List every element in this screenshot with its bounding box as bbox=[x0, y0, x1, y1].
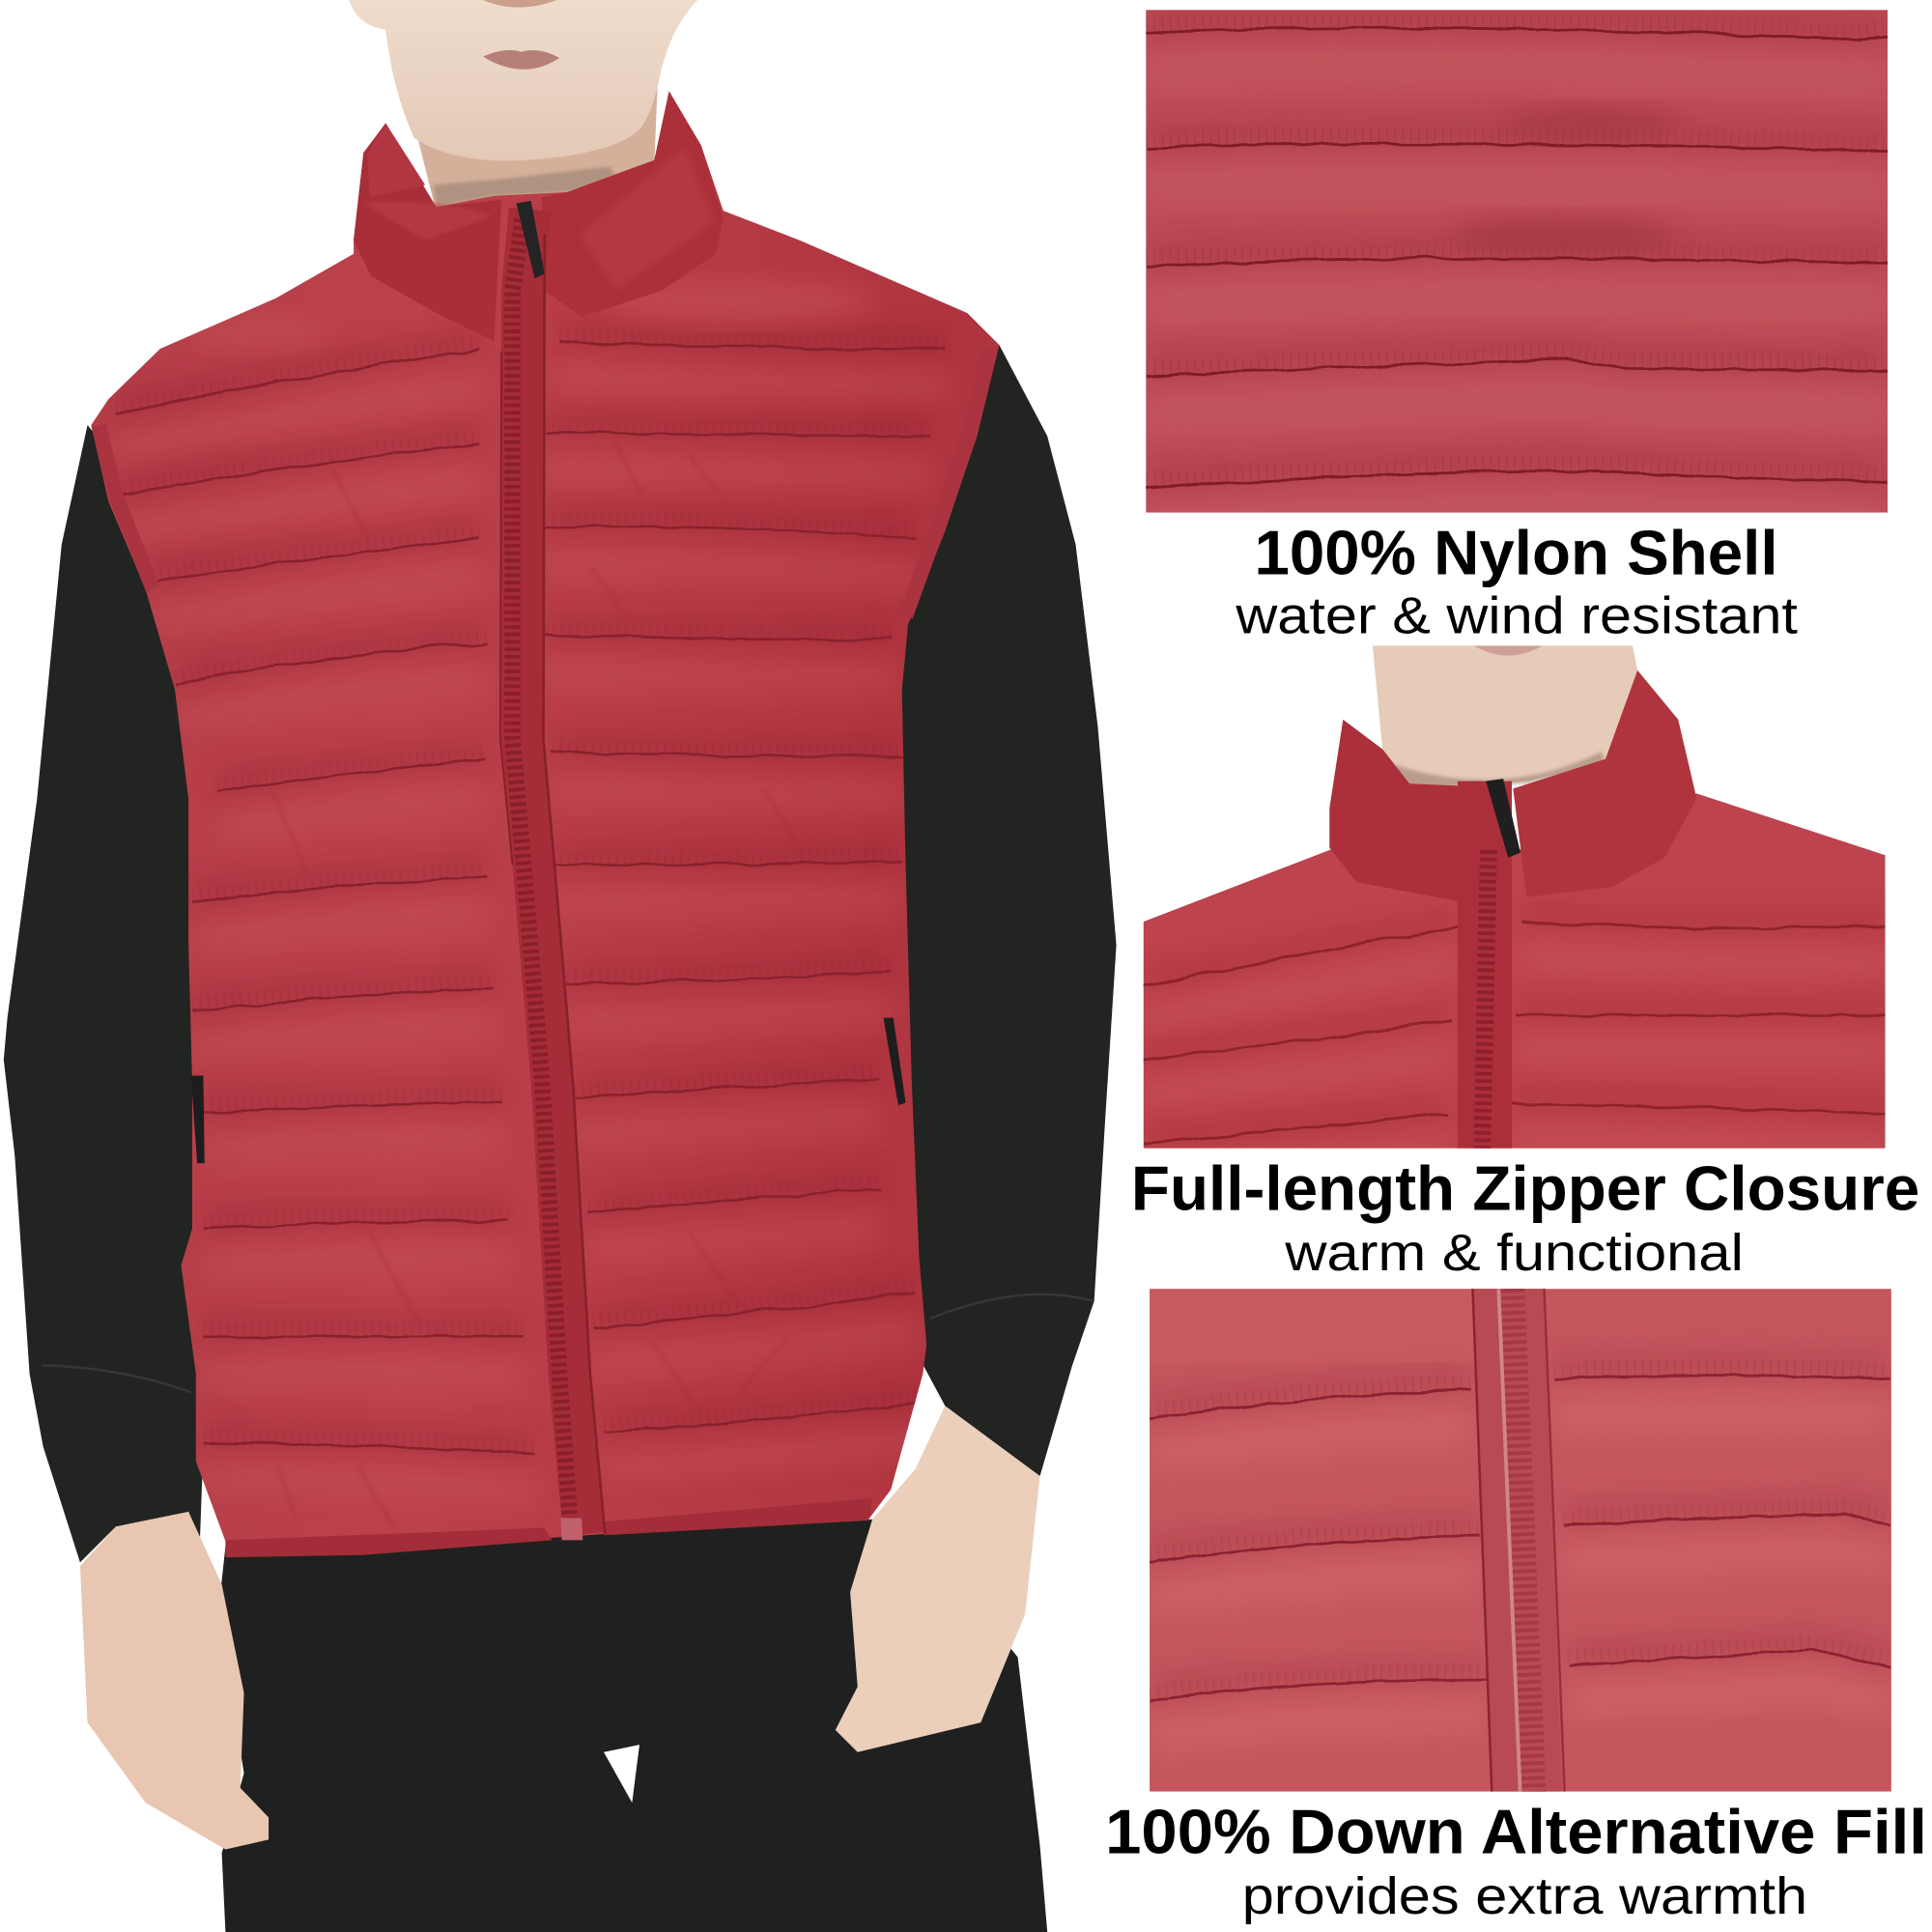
panel: nylon shell close-up bbox=[1146, 10, 1888, 527]
chin bbox=[1373, 645, 1637, 788]
zipper bbox=[1508, 1282, 1528, 1799]
armhole binding bbox=[99, 349, 989, 616]
centre zipper bbox=[500, 210, 605, 1534]
wrinkles bbox=[271, 443, 801, 1528]
hem binding bbox=[225, 1498, 872, 1557]
right black sleeve bbox=[894, 332, 1117, 1476]
left hand bbox=[80, 1512, 269, 1850]
collar bbox=[354, 91, 724, 341]
heading: 100% Down Alternative Fill: 100% Down Alternative Fill bbox=[1105, 1796, 1927, 1866]
model photo: man wearing red puffer vest bbox=[4, 0, 1117, 1932]
white gap between legs bbox=[604, 1745, 639, 1803]
left black sleeve bbox=[4, 425, 215, 1562]
panel: down alternative fill close-up bbox=[1150, 1282, 1891, 1799]
panel: zipper and collar close-up bbox=[1144, 645, 1888, 1178]
subheading: warm and functional: warm & functional bbox=[1284, 1225, 1744, 1282]
right hand bbox=[836, 1406, 1040, 1752]
heading: 100% Nylon Shell: 100% Nylon Shell bbox=[1254, 517, 1778, 587]
zipper pull bbox=[516, 201, 545, 278]
zipper pull bbox=[1486, 779, 1520, 858]
side pocket zipper pulls bbox=[191, 1018, 905, 1163]
subheading: provides extra warmth: provides extra warmth bbox=[1242, 1868, 1807, 1925]
zipper bbox=[1463, 781, 1506, 1149]
red puffer vest body bbox=[91, 91, 999, 1557]
subheading: water and wind resistant: water & wind resistant bbox=[1235, 588, 1798, 645]
face and neck bbox=[349, 0, 697, 212]
zipper bottom stop bbox=[560, 1518, 582, 1540]
cuff seams bbox=[42, 1294, 1094, 1392]
shoulders bbox=[1144, 793, 1888, 1149]
heading: Full-length Zipper Closure: Full-length Zipper Closure bbox=[1131, 1153, 1919, 1224]
collar bbox=[1329, 720, 1466, 902]
black trousers bbox=[218, 1520, 1047, 1932]
